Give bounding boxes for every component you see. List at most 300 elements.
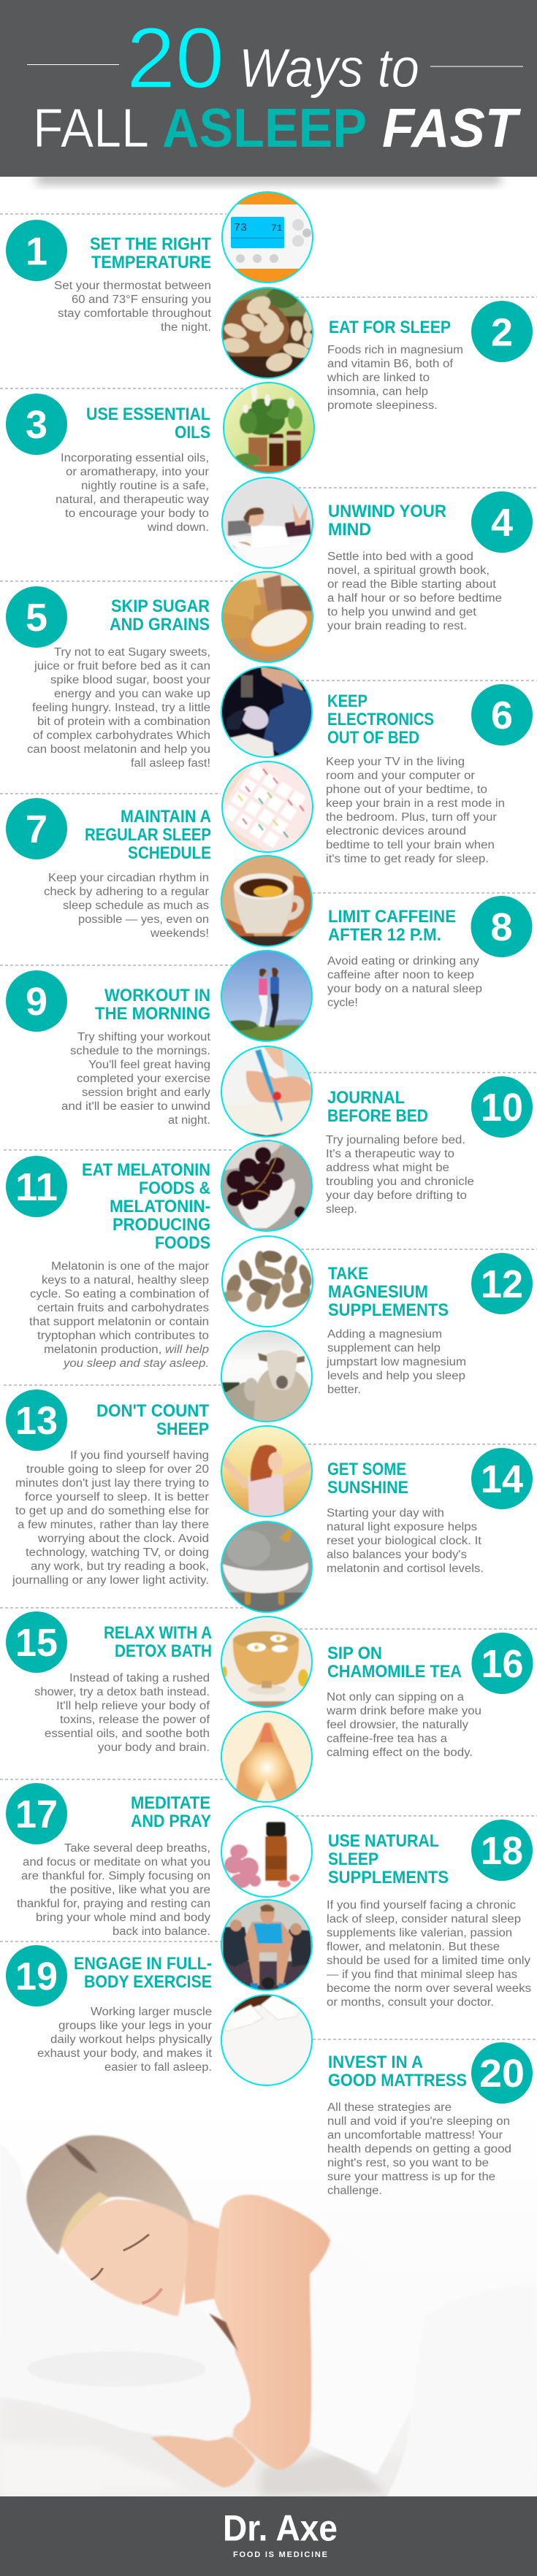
tip 15: relax with a detox bath bbox=[0, 1521, 313, 1754]
number badge 19 bbox=[6, 1945, 67, 2006]
heading: LIMIT CAFFEINE bbox=[328, 907, 456, 927]
body text: are thankful for. Simply focusing on bbox=[21, 1870, 210, 1882]
body text: novel, a spiritual growth book, bbox=[327, 564, 490, 577]
body text: Avoid eating or drinking any bbox=[327, 955, 479, 967]
body text: address what might be bbox=[326, 1162, 449, 1174]
photo: tablets in a wooden bowl bbox=[213, 287, 313, 380]
photo: woman enjoying sunshine in a wheat field bbox=[221, 1425, 313, 1518]
photo: supplement bottle with pink flowers bbox=[221, 1806, 313, 1898]
body text: technology, watching TV, or doing bbox=[26, 1546, 209, 1559]
body text: a few minutes, rather than lay there bbox=[18, 1519, 209, 1531]
body text: trouble going to sleep for over 20 bbox=[26, 1463, 209, 1476]
body text: check by adhering to a regular bbox=[44, 886, 209, 898]
body text: It's a therapeutic way to bbox=[326, 1148, 454, 1160]
body text: sleep schedule as much as bbox=[63, 900, 209, 912]
photo: person using phone in bed at night bbox=[221, 666, 313, 758]
photo: thermostat bbox=[221, 191, 314, 283]
body text: keep your brain in a rest mode in bbox=[326, 797, 505, 810]
number badge 11 bbox=[6, 1156, 67, 1217]
heading: INVEST IN A bbox=[328, 2052, 423, 2072]
body text: null and void if you're sleeping on bbox=[327, 2115, 510, 2128]
number badge 16: 16 bbox=[481, 1642, 523, 1686]
heading bbox=[90, 234, 211, 272]
body text: and it'll be easier to unwind bbox=[61, 1100, 210, 1113]
tip 11: eat melatonin foods bbox=[4, 1140, 313, 1370]
body text: wind down. bbox=[147, 521, 209, 534]
number badge 7: 7 bbox=[26, 808, 47, 851]
number badge 4 bbox=[471, 491, 533, 553]
body text bbox=[61, 1031, 211, 1127]
heading: MELATONIN- bbox=[110, 1197, 210, 1216]
heading bbox=[74, 1954, 212, 1992]
heading: EAT FOR SLEEP bbox=[329, 318, 451, 337]
footer bar with Dr. Axe logo bbox=[0, 2496, 537, 2576]
body text: and vitamin B6, both of bbox=[327, 358, 454, 370]
body text: Instead of taking a rushed bbox=[69, 1672, 210, 1684]
number badge 5: 5 bbox=[26, 596, 47, 640]
photo: two women jogging outdoors bbox=[221, 950, 314, 1043]
body text: phone out of your bedtime, to bbox=[326, 783, 487, 796]
body text: easier to fall asleep. bbox=[104, 2061, 212, 2074]
body text bbox=[12, 1449, 209, 1587]
body text bbox=[326, 1691, 481, 1759]
body text: energy and you can wake up bbox=[54, 688, 210, 700]
heading: OILS bbox=[175, 423, 210, 442]
heading: EAT MELATONIN bbox=[82, 1160, 210, 1180]
body text: worrying about the clock. Avoid bbox=[37, 1533, 209, 1545]
tip 5: skip sugar and grains bbox=[0, 571, 319, 770]
heading: MEDITATE bbox=[131, 1793, 210, 1813]
heading: TEMPERATURE bbox=[91, 253, 211, 272]
photo: paper calendar bbox=[221, 761, 313, 853]
body text: juice or fruit before bed as it can bbox=[34, 660, 210, 672]
body text: to encourage your body to bbox=[65, 507, 209, 520]
body text bbox=[327, 2101, 511, 2197]
body text bbox=[326, 1134, 474, 1216]
body text: room and your computer or bbox=[326, 770, 475, 782]
body text: your day before drifting to bbox=[326, 1189, 467, 1202]
body text: toxins, release the power of bbox=[60, 1714, 210, 1726]
photo: sheep in a field bbox=[221, 1330, 313, 1423]
body text: certain fruits and carbohydrates bbox=[37, 1302, 209, 1314]
body text: bring your whole mind and body bbox=[36, 1912, 210, 1924]
body text: supplement can help bbox=[327, 1342, 441, 1354]
heading: GOOD MATTRESS bbox=[328, 2071, 467, 2090]
heading: PRODUCING bbox=[113, 1215, 210, 1235]
body text: bedtime to tell your brain when bbox=[326, 839, 495, 851]
body text: natural, and therapeutic way bbox=[56, 494, 209, 506]
body text: your brain reading to rest. bbox=[327, 620, 467, 632]
body text: of complex carbohydrates Which bbox=[33, 729, 210, 742]
tip 18: use natural sleep supplements bbox=[221, 1806, 537, 2009]
heading: CHAMOMILE TEA bbox=[327, 1662, 462, 1682]
number badge 18 bbox=[471, 1820, 533, 1881]
body text bbox=[56, 452, 209, 534]
body text: at night. bbox=[168, 1114, 210, 1127]
body text bbox=[326, 756, 505, 865]
body text: that support melatonin or contain bbox=[29, 1316, 209, 1328]
body text: health depends on getting a good bbox=[327, 2143, 511, 2155]
title: Fall Asleep Fast: FAST bbox=[382, 97, 522, 158]
body text: Working larger muscle bbox=[91, 2006, 212, 2018]
heading: SHEEP bbox=[156, 1419, 209, 1439]
body text: Try not to eat Sugary sweets, bbox=[54, 646, 210, 659]
heading bbox=[131, 1793, 211, 1831]
body text: cycle. So eating a combination of bbox=[30, 1288, 210, 1300]
heading bbox=[327, 691, 434, 748]
body text: exhaust your body, and makes it bbox=[37, 2047, 213, 2060]
heading: SLEEP bbox=[328, 1849, 378, 1869]
number badge 8: 8 bbox=[490, 905, 513, 949]
heading bbox=[328, 1264, 449, 1320]
title: Fall Asleep Fast: ASLEEP bbox=[162, 97, 367, 158]
body text: completed your exercise bbox=[77, 1073, 210, 1085]
heading: DON'T COUNT bbox=[96, 1401, 209, 1421]
body text: You'll feel great having bbox=[88, 1059, 210, 1071]
body text bbox=[326, 1328, 466, 1396]
photo: thermostat: 71 bbox=[271, 223, 283, 234]
heading bbox=[82, 1160, 210, 1253]
number badge 13 bbox=[6, 1389, 67, 1451]
heading: TAKE bbox=[328, 1264, 368, 1284]
heading bbox=[86, 405, 210, 442]
body text: nightly routine is a safe, bbox=[81, 480, 209, 492]
number badge 20 bbox=[471, 2042, 533, 2104]
body text: minutes don't just lay there trying to bbox=[15, 1477, 209, 1490]
photo: clawfoot bath tub bbox=[221, 1521, 313, 1614]
heading: UNWIND YOUR bbox=[328, 502, 446, 521]
body text: bit of protein with a combination bbox=[37, 716, 210, 728]
heading: SIP ON bbox=[327, 1644, 382, 1663]
title: 20 Ways to: Ways to bbox=[239, 37, 419, 99]
body text: stay comfortable throughout bbox=[58, 307, 212, 320]
body text: Keep your circadian rhythm in bbox=[48, 872, 209, 884]
heading: ELECTRONICS bbox=[327, 710, 434, 729]
body text: possible — yes, even on bbox=[78, 913, 209, 926]
body text: jumpstart low magnesium bbox=[326, 1356, 466, 1368]
body text: reset your biological clock. It bbox=[327, 1535, 482, 1547]
number badge 12 bbox=[471, 1253, 533, 1314]
body text: Settle into bed with a good bbox=[327, 551, 473, 563]
title: Fall Asleep Fast bbox=[33, 97, 522, 158]
body text: All these strategies are bbox=[327, 2101, 452, 2114]
heading: AND PRAY bbox=[131, 1812, 211, 1831]
body text: promote sleepiness. bbox=[327, 399, 438, 412]
photo: cup of chamomile tea bbox=[221, 1616, 313, 1709]
heading bbox=[96, 1401, 209, 1439]
body text: thankful for, praying and resting can bbox=[17, 1898, 210, 1910]
tip 8: limit caffeine after 12 pm bbox=[221, 855, 537, 1009]
heading: THE MORNING bbox=[95, 1004, 210, 1024]
heading bbox=[95, 986, 210, 1024]
body text: fall asleep fast! bbox=[131, 757, 210, 770]
body text bbox=[327, 551, 502, 632]
number badge 20: 20 bbox=[479, 2052, 525, 2096]
bottom photo: woman sleeping on white pillow bbox=[0, 2103, 537, 2497]
number badge 3 bbox=[6, 394, 67, 455]
body text: — if you find that minimal sleep has bbox=[327, 1969, 517, 1981]
body text bbox=[327, 1899, 531, 2009]
tip 10: journal before bed bbox=[221, 1046, 537, 1216]
heading: MAINTAIN A bbox=[121, 807, 211, 827]
number badge 14: 14 bbox=[481, 1457, 523, 1501]
body text: weekends! bbox=[150, 927, 209, 940]
number badge 9 bbox=[6, 970, 67, 1032]
number badge 1 bbox=[6, 220, 67, 281]
photo: hand writing in a journal bbox=[221, 1046, 313, 1138]
body text: Foods rich in magnesium bbox=[327, 344, 463, 356]
number badge 13: 13 bbox=[15, 1399, 58, 1443]
heading: SUPPLEMENTS bbox=[328, 1868, 449, 1887]
number badge 8 bbox=[471, 896, 532, 957]
body text: feeling hungry. Instead, try a little bbox=[32, 702, 210, 714]
photo: woman reading in bed bbox=[221, 477, 313, 570]
body text bbox=[17, 1842, 210, 1938]
body text: Try journaling before bed. bbox=[326, 1134, 465, 1146]
heading bbox=[328, 2052, 467, 2090]
photo: praying hands with glow bbox=[221, 1711, 313, 1803]
heading: GET SOME bbox=[327, 1460, 406, 1479]
body text: shower, try a detox bath instead. bbox=[34, 1686, 210, 1698]
number badge 16 bbox=[472, 1633, 533, 1694]
tip 17: meditate and pray bbox=[0, 1711, 313, 1938]
number badge 3: 3 bbox=[26, 403, 47, 447]
body text bbox=[27, 646, 210, 770]
heading: REGULAR SLEEP bbox=[85, 825, 211, 845]
body text: calming effect on the body. bbox=[327, 1747, 473, 1759]
heading: SUPPLEMENTS bbox=[328, 1300, 449, 1320]
header banner bbox=[0, 0, 537, 184]
body text: or aromatherapy, into your bbox=[66, 466, 209, 478]
body text: which are linked to bbox=[327, 372, 430, 384]
body text: insomnia, can help bbox=[327, 386, 428, 398]
number badge 12: 12 bbox=[481, 1262, 523, 1306]
heading: USE ESSENTIAL bbox=[86, 405, 210, 424]
heading: ENGAGE IN FULL- bbox=[74, 1954, 212, 1974]
body text: an uncomfortable mattress! Your bbox=[327, 2129, 503, 2142]
number badge 6 bbox=[471, 684, 533, 745]
body text: also balances your body's bbox=[327, 1549, 467, 1561]
tip 14: get some sunshine bbox=[221, 1425, 537, 1575]
body text: Adding a magnesium bbox=[327, 1328, 442, 1341]
photo: white bed with pillows bbox=[221, 1994, 313, 2086]
heading: FOODS & bbox=[139, 1178, 210, 1198]
photo: cherries in a white cup bbox=[221, 1140, 313, 1232]
number badge 18: 18 bbox=[481, 1829, 523, 1873]
body text: electronic devices around bbox=[326, 825, 466, 837]
tip 7: maintain a regular sleep schedule bbox=[0, 761, 313, 937]
body text: melatonin production, will help bbox=[44, 1343, 209, 1356]
heading: SET THE RIGHT bbox=[90, 234, 211, 254]
heading: OUT OF BED bbox=[327, 728, 419, 748]
body text: become the norm over several weeks bbox=[327, 1982, 531, 1995]
number badge 17 bbox=[6, 1783, 67, 1844]
body text: force yourself to sleep. It is better bbox=[25, 1491, 209, 1503]
body text bbox=[37, 2006, 213, 2074]
heading bbox=[110, 597, 210, 635]
body text: feel drowsier, the naturally bbox=[327, 1719, 468, 1731]
heading: RELAX WITH A bbox=[104, 1623, 212, 1643]
body text: flower, and melatonin. But these bbox=[327, 1941, 500, 1953]
body text: daily workout helps physically bbox=[50, 2033, 212, 2046]
body text: journalling or any lower light activity. bbox=[12, 1574, 209, 1587]
number badge 14 bbox=[471, 1448, 533, 1509]
body text: Melatonin is one of the major bbox=[51, 1260, 209, 1273]
body text: your body and brain. bbox=[98, 1741, 210, 1754]
body text: sleep. bbox=[326, 1203, 357, 1216]
heading: FOODS bbox=[155, 1233, 210, 1253]
body text: essential oils, and soothe both bbox=[45, 1728, 210, 1740]
logo tagline: FOOD IS MEDICINE bbox=[233, 2550, 327, 2559]
body text: it's time to get ready for sleep. bbox=[326, 853, 489, 865]
body text: any work, but try reading a book, bbox=[31, 1560, 209, 1573]
body text: natural light exposure helps bbox=[327, 1521, 477, 1533]
body text: you sleep and stay asleep. bbox=[63, 1357, 209, 1370]
body text bbox=[34, 1672, 210, 1754]
photo: herbs and oil bottles bbox=[223, 382, 315, 475]
tip 6: keep electronics out of bed bbox=[221, 666, 537, 865]
body text: Take several deep breaths, bbox=[64, 1842, 210, 1855]
heading: BEFORE BED bbox=[327, 1106, 428, 1126]
heading: AFTER 12 P.M. bbox=[328, 925, 441, 945]
photo: brown sugar and bowl of white sugar bbox=[221, 571, 319, 663]
number badge 5 bbox=[6, 586, 67, 648]
body text: the positive, like what you are bbox=[50, 1884, 210, 1896]
heading: WORKOUT IN bbox=[104, 986, 210, 1005]
body text: back into balance. bbox=[113, 1925, 210, 1938]
body text: your body on a natural sleep bbox=[327, 983, 482, 995]
heading: AND GRAINS bbox=[110, 615, 210, 635]
tip 9: workout in the morning bbox=[0, 950, 314, 1127]
number badge 10: 10 bbox=[481, 1086, 523, 1130]
body text: It'll help relieve your body of bbox=[56, 1700, 210, 1712]
title: 20 Ways to bbox=[126, 10, 419, 107]
body text: caffeine-free tea has a bbox=[327, 1733, 447, 1745]
body text: better. bbox=[327, 1384, 361, 1396]
heading: SUNSHINE bbox=[327, 1478, 408, 1498]
body text: and focus or meditate on what you bbox=[23, 1856, 210, 1868]
body text bbox=[327, 955, 482, 1009]
heading: SCHEDULE bbox=[128, 843, 211, 863]
tip 3: use essential oils bbox=[0, 382, 315, 534]
heading: JOURNAL bbox=[327, 1088, 405, 1108]
body text: cycle! bbox=[327, 997, 358, 1009]
body text: If you find yourself facing a chronic bbox=[327, 1899, 516, 1912]
body text: challenge. bbox=[327, 2185, 382, 2197]
heading: USE NATURAL bbox=[328, 1831, 439, 1851]
body text: schedule to the mornings. bbox=[70, 1045, 210, 1057]
tip 20: invest in a good mattress bbox=[221, 1994, 537, 2197]
number badge 6: 6 bbox=[491, 694, 513, 737]
number badge 4: 4 bbox=[491, 501, 513, 545]
body text: or read the Bible starting about bbox=[327, 578, 497, 591]
heading bbox=[328, 502, 446, 540]
body text bbox=[29, 1260, 210, 1370]
body text: Keep your TV in the living bbox=[326, 756, 465, 768]
body text: Starting your day with bbox=[327, 1507, 444, 1519]
heading bbox=[327, 1088, 428, 1126]
photo: group kettlebell workout bbox=[221, 1899, 313, 1992]
number badge 9: 9 bbox=[26, 980, 47, 1024]
body text: should be used for a limited time only bbox=[327, 1955, 530, 1967]
title: Fall Asleep Fast: FALL bbox=[33, 97, 149, 158]
tip 12: take magnesium supplements bbox=[221, 1235, 537, 1396]
body text: keys to a natural, healthy sleep bbox=[42, 1274, 209, 1287]
body text: If you find yourself having bbox=[70, 1449, 209, 1462]
body text bbox=[54, 280, 212, 334]
heading: DETOX BATH bbox=[115, 1641, 212, 1661]
tip 2: eat for sleep bbox=[213, 287, 537, 412]
tip 19: engage in full-body exercise bbox=[0, 1899, 313, 2074]
heading bbox=[328, 1831, 449, 1887]
title: 20 Ways to: 20 bbox=[126, 10, 224, 107]
heading: MAGNESIUM bbox=[328, 1282, 428, 1302]
body text: levels and help you sleep bbox=[327, 1370, 465, 1382]
body text: to help you unwind and get bbox=[327, 606, 477, 618]
body text bbox=[327, 1507, 484, 1575]
photo: cup of coffee bbox=[221, 855, 313, 948]
body text: groups like your legs in your bbox=[58, 2020, 212, 2032]
logo wordmark: Dr. Axe bbox=[223, 2507, 338, 2548]
body text: the night. bbox=[161, 321, 211, 334]
number badge 19: 19 bbox=[15, 1955, 58, 1998]
body text: or months, consult your doctor. bbox=[327, 1996, 494, 2009]
heading: SKIP SUGAR bbox=[111, 597, 210, 616]
body text: supplements like valerian, passion bbox=[327, 1927, 512, 1939]
body text: night's rest, so you want to be bbox=[327, 2157, 489, 2169]
body text: a half hour or so before bedtime bbox=[327, 592, 502, 605]
number badge 15: 15 bbox=[15, 1621, 58, 1665]
heading bbox=[328, 907, 456, 945]
number badge 2 bbox=[471, 301, 533, 362]
heading: MIND bbox=[328, 520, 371, 540]
photo: thermostat: 73 bbox=[234, 222, 247, 234]
body text bbox=[44, 872, 209, 940]
body text: Not only can sipping on a bbox=[327, 1691, 464, 1703]
body text: melatonin and cortisol levels. bbox=[327, 1563, 484, 1575]
heading bbox=[104, 1623, 212, 1661]
body text: Set your thermostat between bbox=[54, 280, 211, 292]
body text: sure your mattress is up for the bbox=[327, 2171, 495, 2183]
body text: warm drink before make you bbox=[326, 1705, 481, 1717]
body text: Try shifting your workout bbox=[77, 1031, 211, 1043]
tip 4: unwind your mind bbox=[221, 477, 537, 632]
body text: caffeine after noon to keep bbox=[327, 969, 474, 981]
body text: 60 and 73°F ensuring you bbox=[72, 294, 211, 306]
body text: spike blood sugar, boost your bbox=[50, 674, 210, 686]
tip 1: set the right temperature bbox=[0, 191, 314, 334]
number badge 2: 2 bbox=[491, 311, 513, 355]
body text: tryptophan which contributes to bbox=[37, 1330, 209, 1342]
heading bbox=[85, 807, 211, 863]
number badge 11: 11 bbox=[15, 1165, 58, 1209]
body text: to get up and do something else for bbox=[15, 1505, 209, 1517]
number badge 17: 17 bbox=[15, 1793, 58, 1836]
tip 13: don't count sheep bbox=[4, 1330, 313, 1587]
tip 16: sip on chamomile tea bbox=[221, 1616, 537, 1759]
body text: troubling you and chronicle bbox=[326, 1176, 474, 1188]
heading bbox=[327, 1460, 408, 1498]
number badge 10 bbox=[471, 1076, 533, 1138]
number badge 1: 1 bbox=[26, 229, 47, 273]
body text: Incorporating essential oils, bbox=[61, 452, 209, 464]
body text bbox=[327, 344, 463, 412]
heading bbox=[327, 1644, 462, 1682]
number badge 15 bbox=[6, 1611, 67, 1673]
body text: session bright and early bbox=[82, 1086, 210, 1099]
body text: lack of sleep, consider natural sleep bbox=[327, 1913, 521, 1925]
heading: BODY EXERCISE bbox=[84, 1972, 212, 1992]
